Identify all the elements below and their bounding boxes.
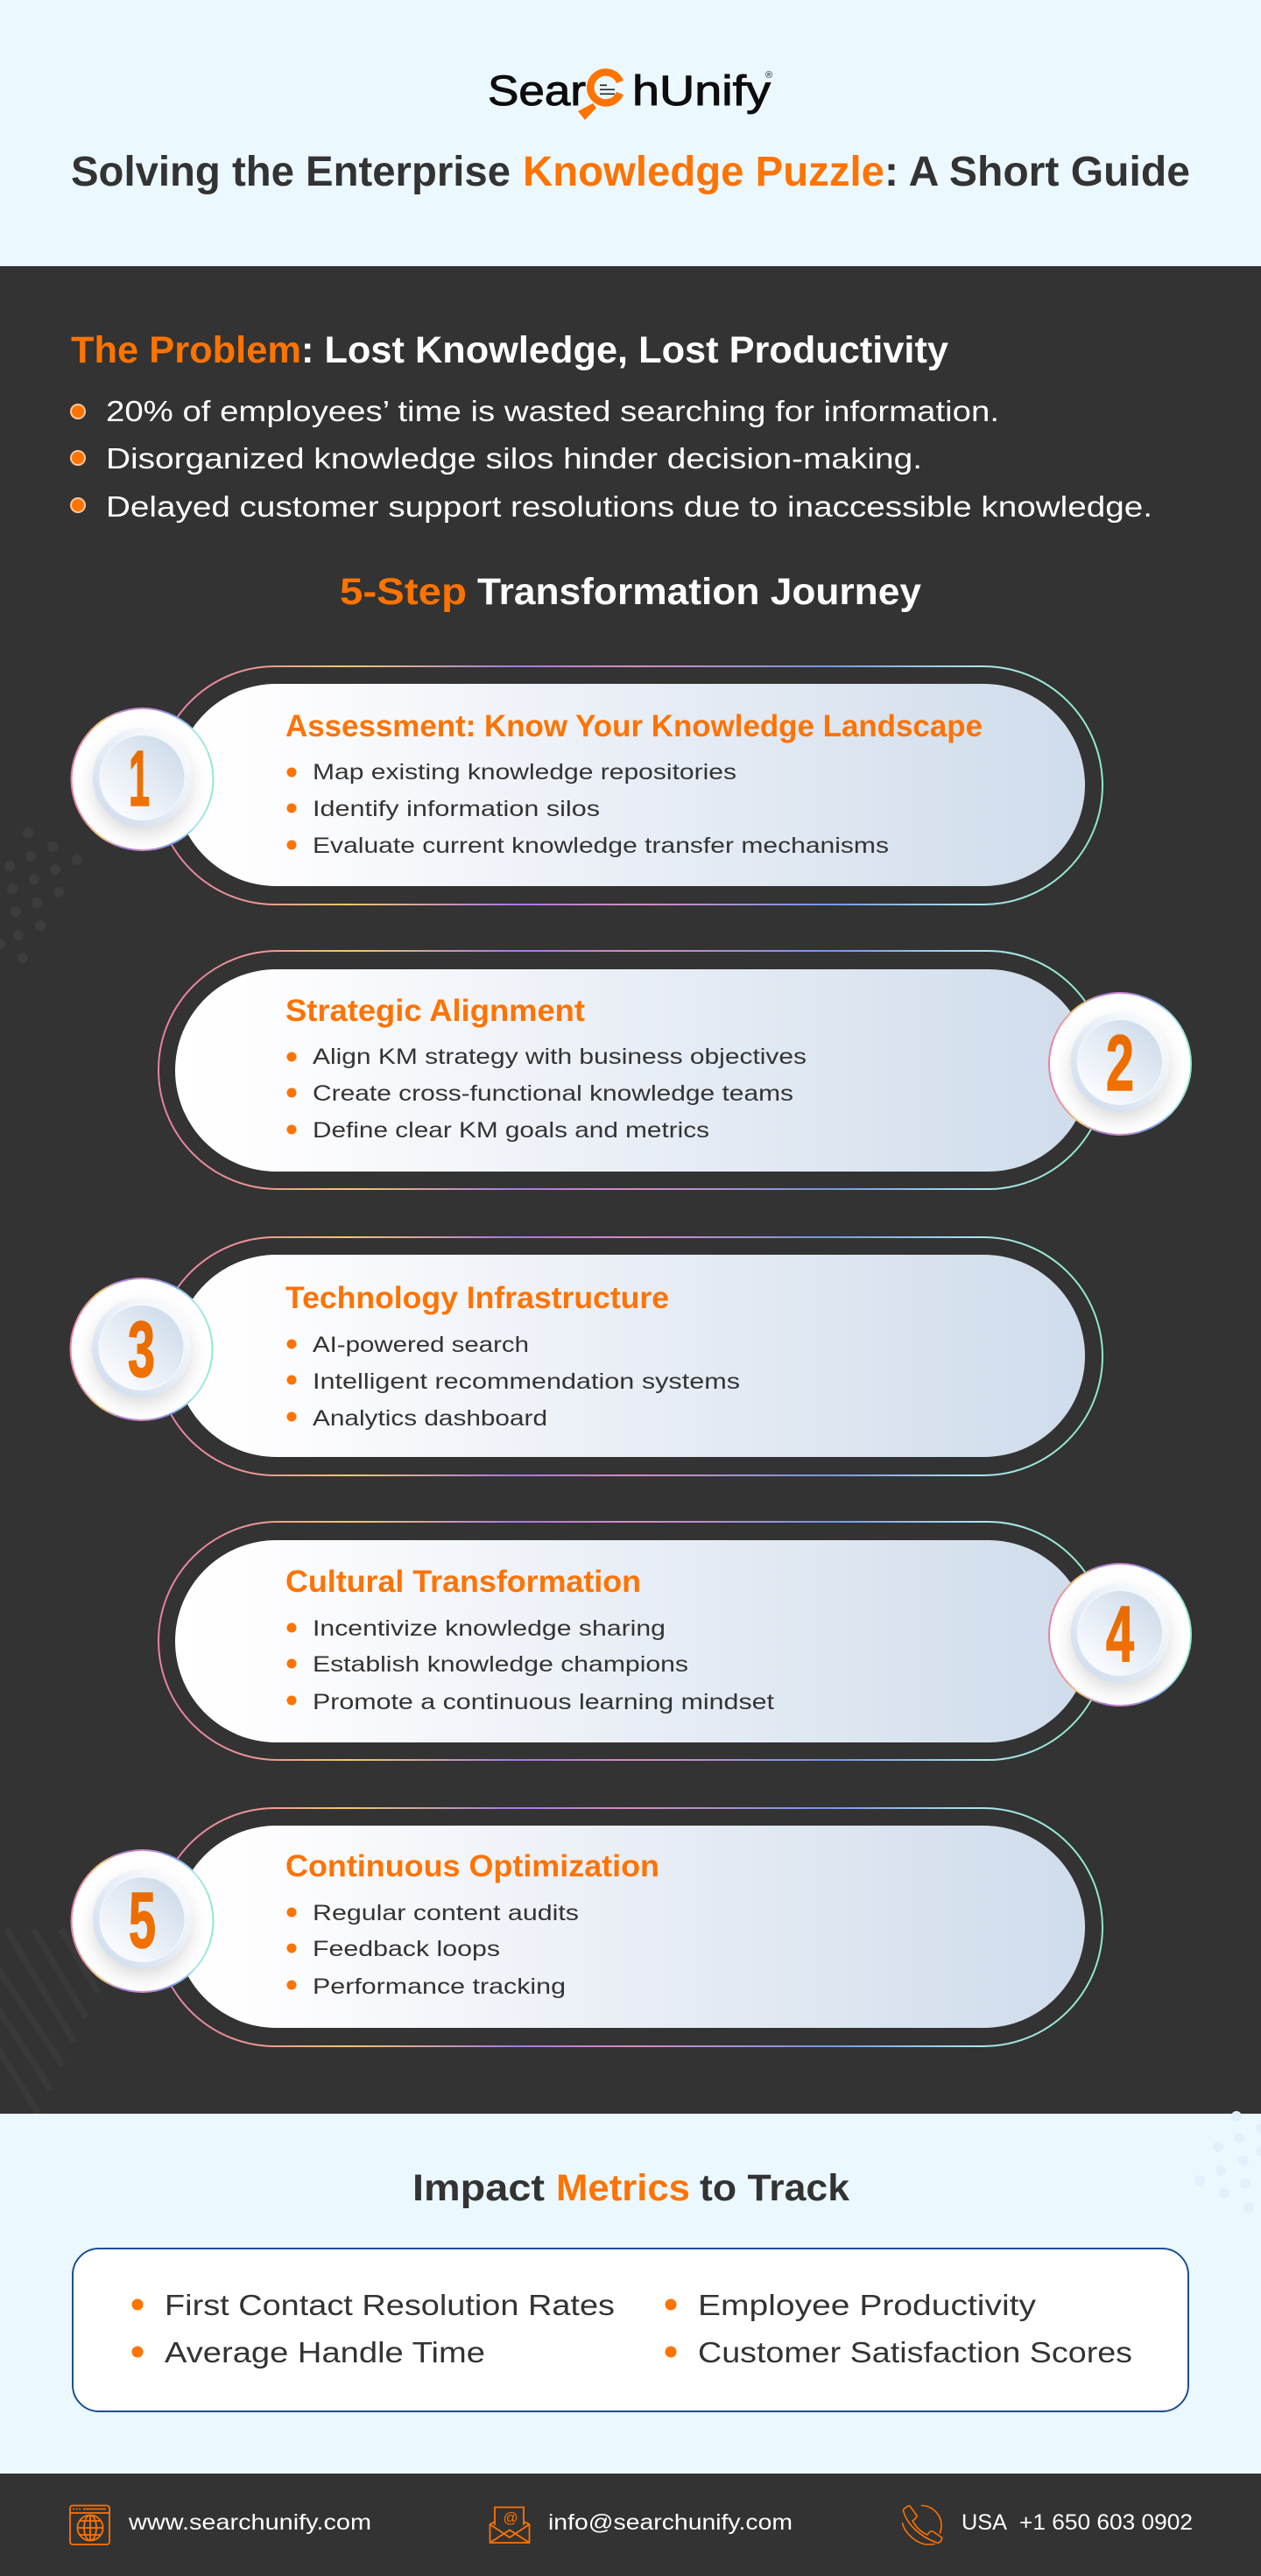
panel: metrics box <box>73 2249 1188 2411</box>
logo: SearchUnify <box>488 68 772 120</box>
panel: metrics box: Customer Satisfaction Scores <box>698 2336 1132 2368</box>
step 1 card: Identify information silos <box>313 797 600 821</box>
panel: metrics box: First Contact Resolution Rates <box>165 2289 615 2321</box>
title: : A Short Guide <box>884 149 1190 195</box>
step 5 card: Continuous Optimization <box>285 1849 659 1883</box>
panel: step 1 <box>72 666 1102 904</box>
step 1 card: Assessment: Know Your Knowledge Landscape <box>285 709 983 743</box>
step 4 card: Promote a continuous learning mindset <box>313 1690 774 1714</box>
title: Solving the Enterprise <box>71 149 511 195</box>
icon: website browser globe <box>70 2506 109 2544</box>
step 3 card: Analytics dashboard <box>313 1406 547 1431</box>
step 3 number badge <box>70 1278 212 1420</box>
step 5 number badge: 5 <box>129 1877 156 1965</box>
title: Knowledge Puzzle <box>523 149 884 195</box>
step 3 card <box>156 1237 1102 1475</box>
text: phone: +1 650 603 0902 <box>1019 2510 1193 2535</box>
step 1 card: Map existing knowledge repositories <box>313 760 736 785</box>
step 1 card <box>156 666 1102 904</box>
step 1 number badge <box>72 708 214 850</box>
step 2 number badge <box>1049 993 1191 1135</box>
icon: email envelope: @ <box>503 2509 518 2526</box>
panel: metrics box: Employee Productivity <box>698 2289 1037 2321</box>
step 2 card <box>159 951 1107 1189</box>
problem bullet list: 20% of employees’ time is wasted searching for information. <box>106 395 999 427</box>
step 5 card: Regular content audits <box>313 1901 579 1925</box>
panel: metrics background <box>0 2114 1261 2474</box>
icon: phone <box>902 2506 942 2544</box>
step 2 card: Define clear KM goals and metrics <box>313 1118 709 1143</box>
problem bullet list: Disorganized knowledge silos hinder decision-making. <box>106 442 922 475</box>
logo: SearchUnify: ® <box>765 70 772 81</box>
heading: impact metrics: Metrics <box>556 2167 690 2209</box>
panel: step 2 <box>159 951 1191 1189</box>
heading: 5-step journey: 5-Step <box>340 571 467 613</box>
heading: the problem: : Lost Knowledge, Lost Productivity <box>301 329 948 371</box>
problem bullet list: Delayed customer support resolutions due to inaccessible knowledge. <box>106 490 1152 523</box>
step 4 number badge <box>1049 1564 1191 1706</box>
step 4 card: Incentivize knowledge sharing <box>313 1616 666 1641</box>
panel: step 3 <box>70 1237 1102 1475</box>
step 4 number badge: 4 <box>1106 1591 1134 1679</box>
step 1 number badge: 1 <box>129 735 150 823</box>
step 5 card <box>156 1808 1102 2046</box>
text: phone: USA <box>962 2510 1007 2535</box>
panel: metrics box: Average Handle Time <box>165 2336 485 2368</box>
panel: step 4 <box>159 1522 1191 1760</box>
icon: email envelope <box>490 2508 529 2543</box>
step 5 card: Feedback loops <box>313 1937 500 1961</box>
step 3 number badge: 3 <box>128 1306 155 1394</box>
decorative stripes left <box>0 1929 98 2114</box>
decorative dots right <box>1194 2111 1261 2213</box>
step 2 card: Create cross-functional knowledge teams <box>313 1081 793 1106</box>
step 2 card: Strategic Alignment <box>285 994 585 1028</box>
panel: step 5 <box>72 1808 1102 2046</box>
panel: dark main background <box>0 266 1261 2114</box>
panel: footer background <box>0 2474 1261 2576</box>
heading: impact metrics: Impact <box>412 2167 545 2209</box>
panel: header background <box>0 0 1261 266</box>
step 1 card: Evaluate current knowledge transfer mechanisms <box>313 834 889 858</box>
step 4 card <box>159 1522 1107 1760</box>
text: website: www.searchunify.com <box>128 2510 371 2535</box>
step 3 card: AI-powered search <box>313 1333 529 1357</box>
title <box>71 149 1190 195</box>
logo: SearchUnify: hUnify <box>632 68 771 115</box>
logo: SearchUnify: Sear <box>488 68 586 115</box>
step 3 card: Intelligent recommendation systems <box>313 1369 740 1394</box>
decorative dots left <box>0 827 82 963</box>
step 2 number badge: 2 <box>1106 1020 1134 1108</box>
heading: the problem: The Problem <box>71 329 301 371</box>
problem bullet list <box>71 395 1152 523</box>
step 4 card: Cultural Transformation <box>285 1565 641 1599</box>
text: email: info@searchunify.com <box>548 2510 793 2535</box>
step 2 card: Align KM strategy with business objectives <box>313 1045 807 1069</box>
heading: impact metrics: to Track <box>700 2167 849 2209</box>
heading: 5-step journey: Transformation Journey <box>477 571 921 613</box>
step 3 card: Technology Infrastructure <box>285 1281 669 1315</box>
step 4 card: Establish knowledge champions <box>313 1652 688 1677</box>
step 5 card: Performance tracking <box>313 1974 566 1999</box>
heading: impact metrics <box>412 2167 849 2209</box>
step 5 number badge <box>72 1850 214 1992</box>
